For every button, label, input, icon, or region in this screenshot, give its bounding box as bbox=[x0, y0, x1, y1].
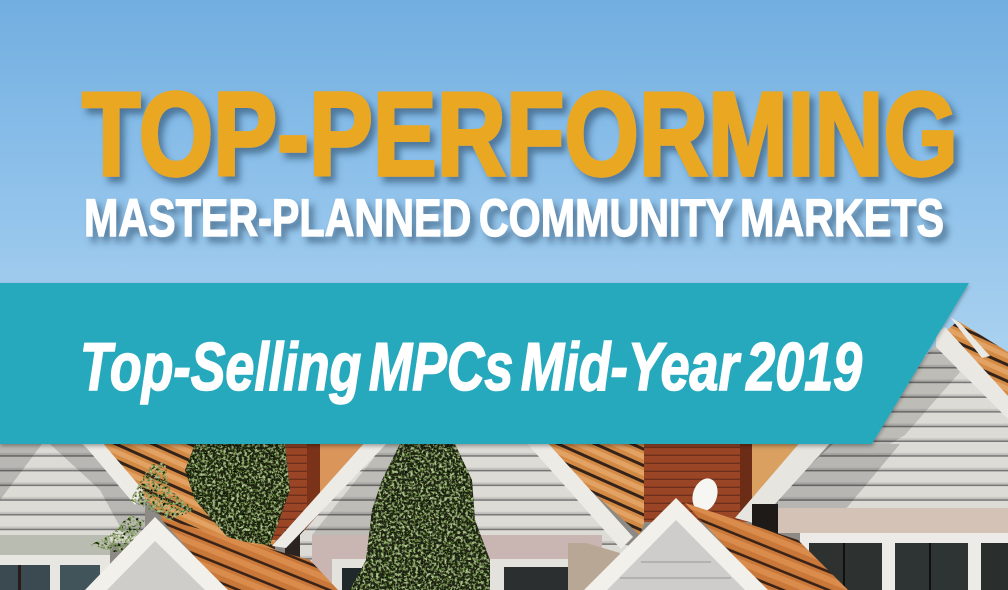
teal banner bbox=[0, 283, 969, 444]
right house windows bbox=[800, 533, 1008, 590]
right house siding bbox=[778, 345, 1008, 510]
right upper roof bbox=[945, 321, 1008, 398]
siding sunlight shadow bbox=[778, 444, 900, 510]
tree left bbox=[90, 444, 290, 555]
left rafter bbox=[80, 440, 143, 505]
satellite dish bbox=[688, 475, 722, 515]
rafter centre right bbox=[524, 440, 633, 549]
orange roof centre right bbox=[535, 440, 645, 535]
front gable left bbox=[85, 517, 338, 590]
dark gap bbox=[285, 530, 315, 570]
middle chimney stub wall bbox=[568, 543, 620, 590]
middle house siding bbox=[300, 440, 630, 590]
front gable right bbox=[584, 498, 848, 590]
tree centre bbox=[350, 444, 490, 590]
rafter centre left bbox=[272, 440, 390, 548]
brick chimney left bbox=[265, 440, 320, 540]
right gable rafter bbox=[936, 327, 1008, 419]
left house windows bbox=[0, 555, 110, 590]
right house wall band bbox=[778, 508, 1008, 533]
brick chimney centre bbox=[644, 440, 752, 522]
orange roof left bbox=[95, 440, 275, 550]
house row photo bbox=[0, 317, 1008, 590]
left house siding bbox=[0, 440, 145, 545]
rafter right of centre bbox=[735, 440, 833, 524]
